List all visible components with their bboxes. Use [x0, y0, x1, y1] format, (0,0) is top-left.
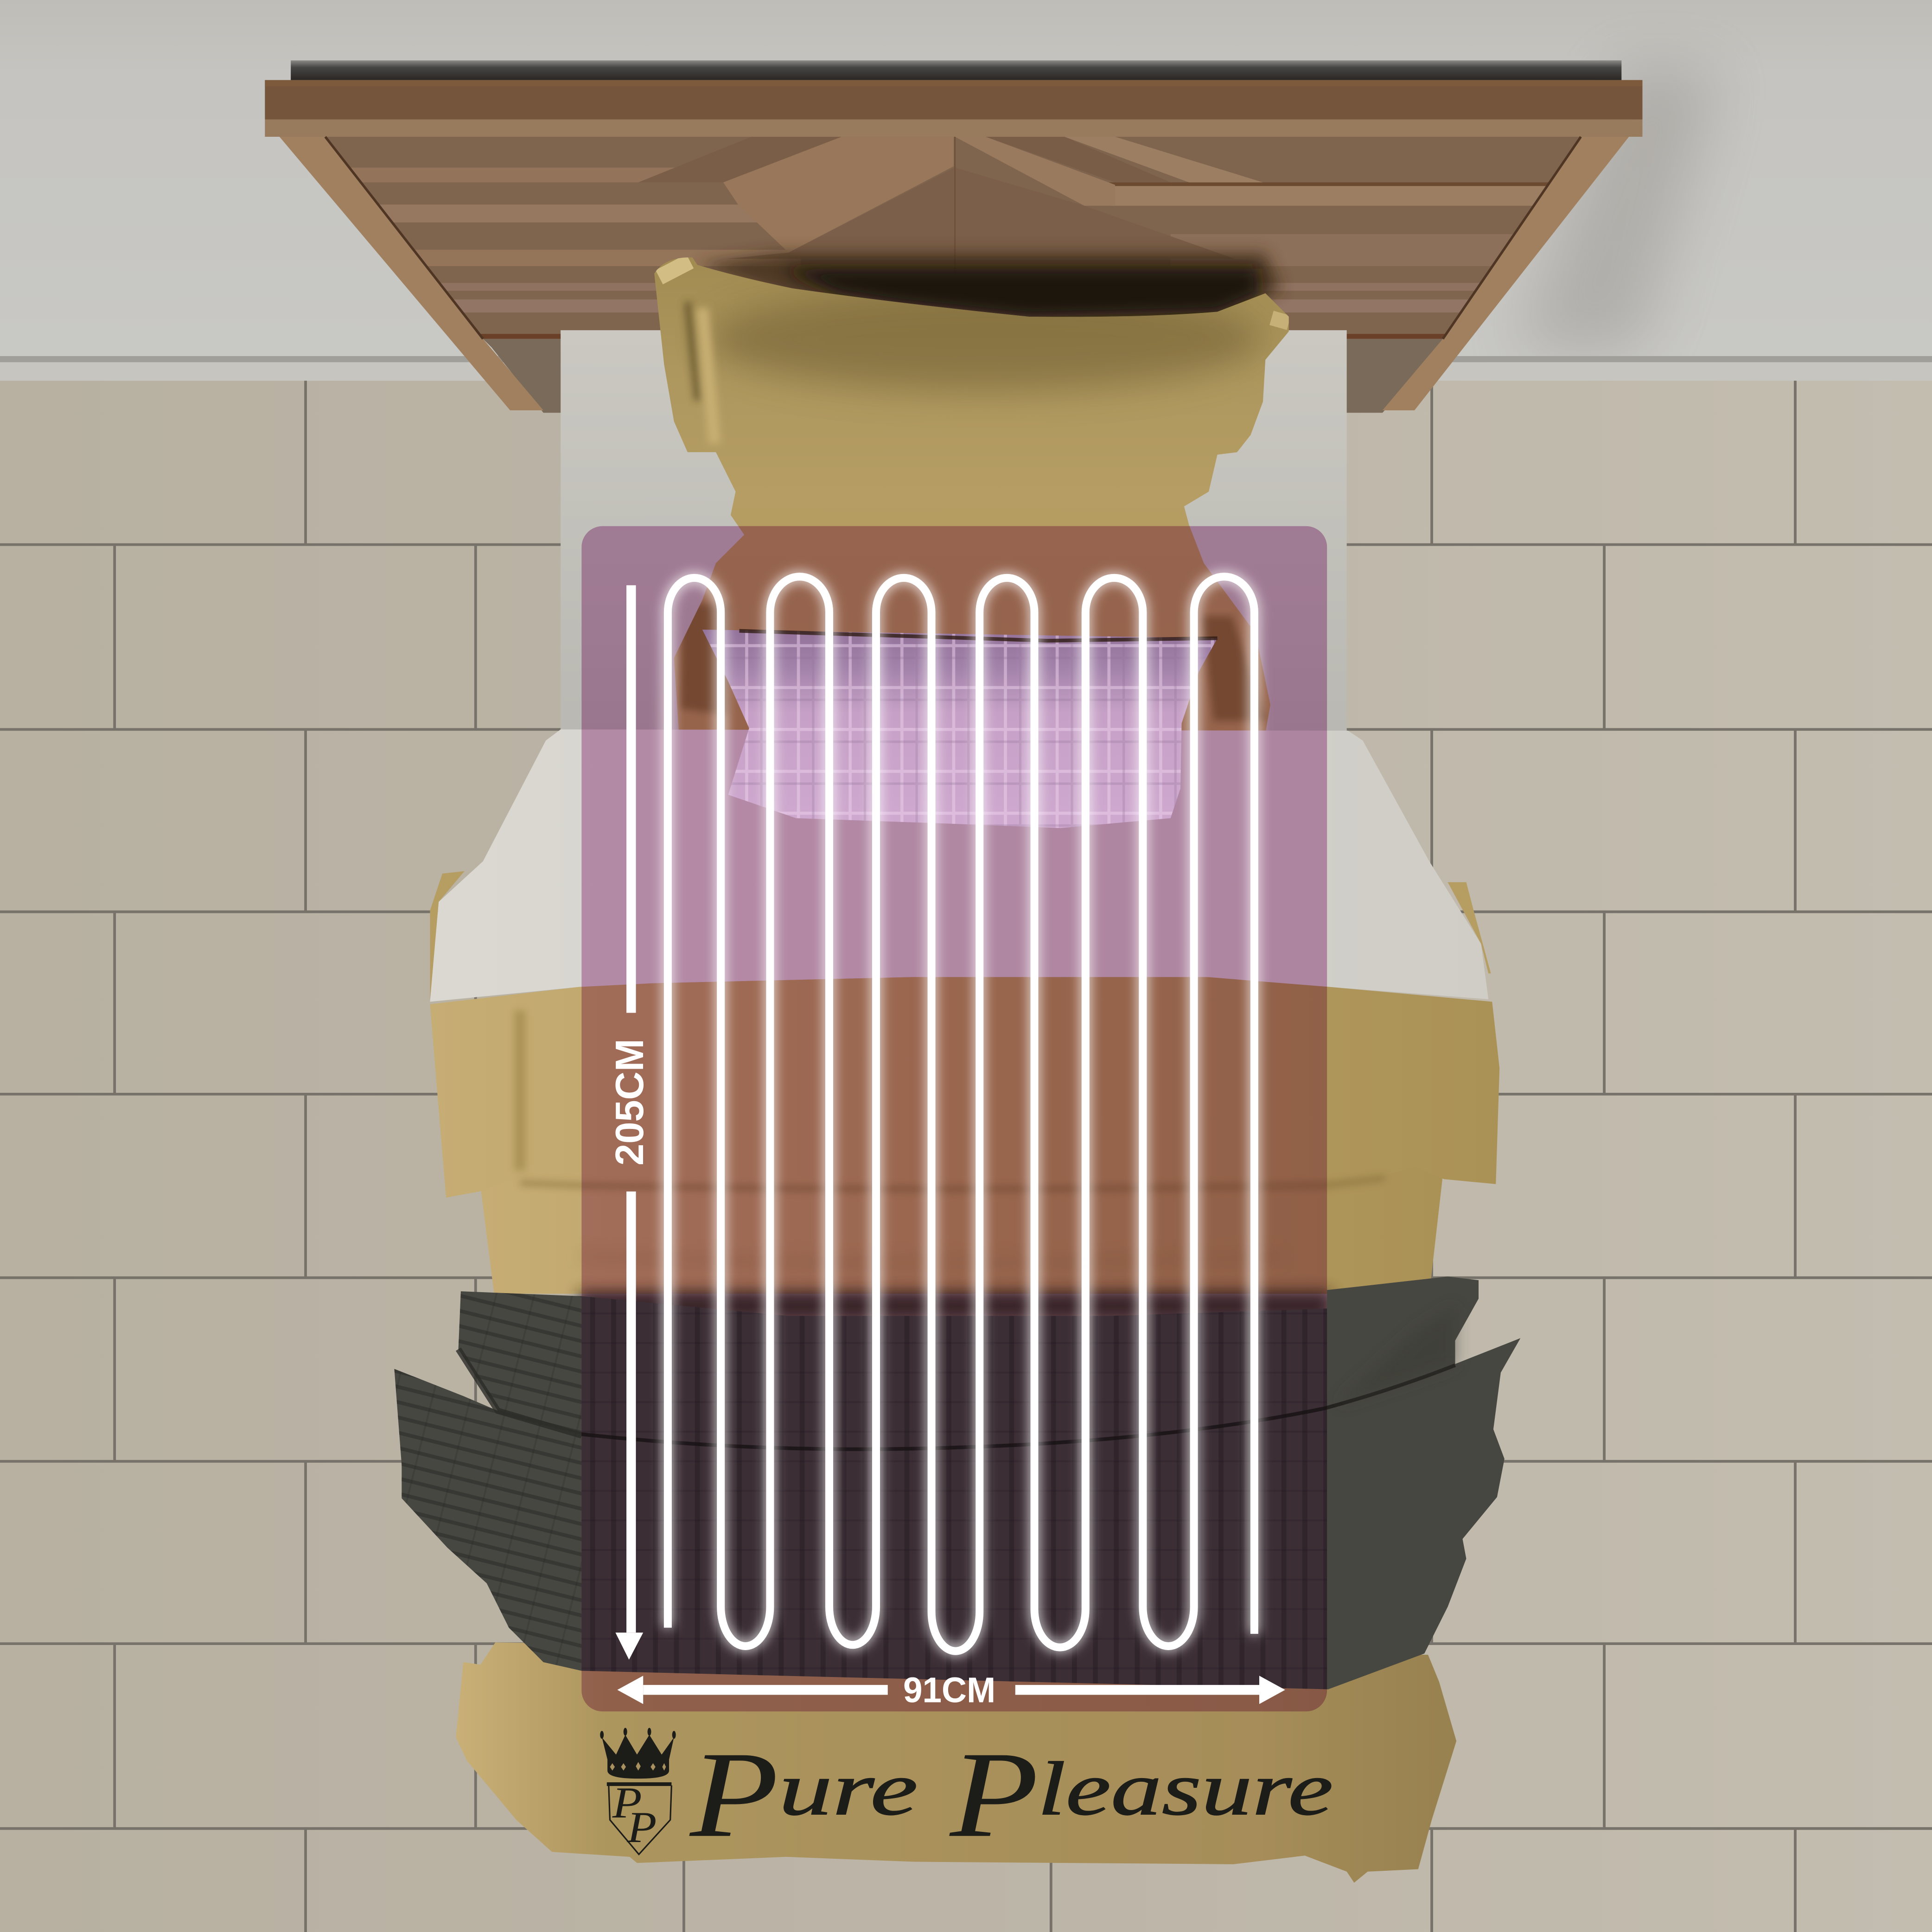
width arrow 91CM: 91CM [903, 1670, 995, 1710]
dark throw blanket [370, 1269, 1540, 1700]
icon: crown [600, 1728, 676, 1779]
logo wordmark: leasure [1038, 1746, 1333, 1831]
mustard pillow [647, 247, 1300, 740]
icon: shield with PP monogram: P [627, 1803, 657, 1852]
icon: shield with PP monogram: P [612, 1778, 642, 1827]
pillow shadow on headboard [697, 253, 1282, 323]
white sheet fold [430, 729, 1488, 1002]
small quilted pillow [702, 630, 1218, 828]
translucent underblanket panel [581, 526, 1327, 1711]
length arrow 205CM: 205CM [608, 1039, 652, 1166]
wall background [0, 0, 1932, 365]
logo wordmark: P [948, 1727, 1039, 1863]
logo wordmark: ure [779, 1746, 918, 1831]
side flaps [430, 871, 1491, 1001]
baseboard [0, 356, 1932, 381]
length arrow 205CM [608, 585, 652, 1660]
width arrow 91CM [617, 1670, 1285, 1710]
headboard shadow on wall [1516, 64, 1719, 351]
neon heating element loop [668, 577, 1254, 1651]
mustard duvet foot [456, 1642, 1456, 1883]
mustard duvet [430, 977, 1499, 1294]
logo: crown and shield [600, 1728, 676, 1855]
logo wordmark [688, 1727, 1333, 1863]
mattress [561, 330, 1347, 737]
headboard [265, 60, 1642, 413]
icon: shield with PP monogram [607, 1778, 671, 1855]
logo wordmark: P [688, 1727, 779, 1863]
